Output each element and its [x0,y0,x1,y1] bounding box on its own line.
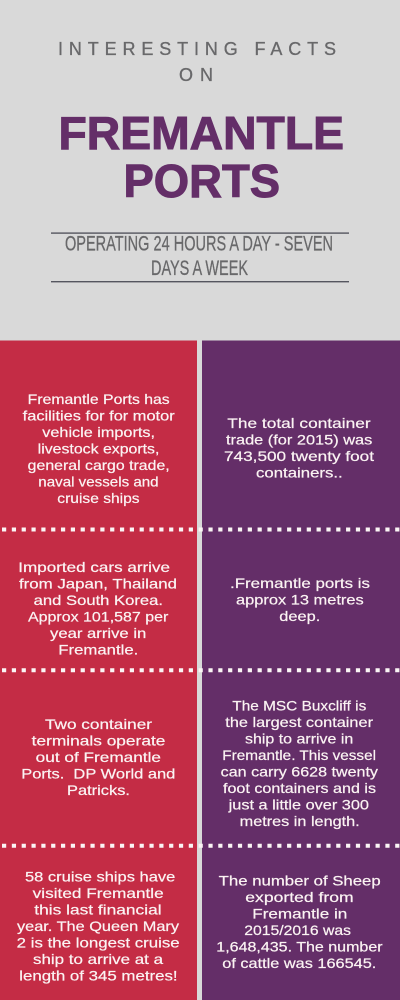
fact: imported cars: Fremantle. [58,642,138,658]
left column background [0,340,197,1000]
fact: MSC Buxcliff: foot containers and is [223,780,376,796]
title: Fremantle Ports: FREMANTLE [58,107,344,159]
fact: facilities: naval vessels and [38,474,159,490]
fact: MSC Buxcliff: just a little over 300 [228,796,369,812]
fact: MSC Buxcliff: Fremantle. This vessel [222,747,376,763]
fact: container trade: trade (for 2015) was [226,432,372,448]
fact: cruise ships: length of 345 metres! [19,968,178,984]
fact: livestock exports: exported from [245,889,354,905]
fact: container trade [224,415,374,480]
fact: cruise ships: 58 cruise ships have [25,869,176,885]
heading: interesting facts on [58,39,336,85]
fact: facilities: vehicle imports, [42,424,155,440]
fact: facilities: livestock exports, [38,440,159,456]
fact: container trade: containers.. [256,464,343,480]
fact: facilities: cruise ships [57,490,140,506]
fact: facilities: facilities for for motor [23,408,175,424]
fact: livestock exports [216,873,383,971]
title: Fremantle Ports [58,107,344,207]
fact: port depth: deep. [279,608,320,624]
fact: imported cars [18,559,177,658]
fact: MSC Buxcliff: The MSC Buxcliff is [232,698,366,714]
header panel [51,39,349,282]
fact: cruise ships: 2 is the longest cruise [17,935,180,951]
fact: MSC Buxcliff: can carry 6628 twenty [221,764,378,780]
fact: cruise ships: ship to arrive at a [33,951,163,967]
title: Fremantle Ports: PORTS [124,155,280,207]
fact: livestock exports: The number of Sheep [219,873,381,889]
fact: livestock exports: of cattle was 166545. [222,955,376,971]
fact: MSC Buxcliff: ship to arrive in [245,730,353,746]
fact: cruise ships [17,869,180,984]
fact: imported cars: Approx 101,587 per [28,608,169,624]
fact: facilities [23,391,175,506]
fact: container terminals: Patricks. [67,782,130,798]
fact: facilities: Fremantle Ports has [28,391,170,407]
fact: port depth [230,575,370,624]
subtitle: operating hours with rules: DAYS A WEEK [151,256,248,280]
fact: MSC Buxcliff [221,698,378,829]
subtitle: operating hours with rules [51,232,349,282]
heading: interesting facts on: ON [179,65,213,85]
fact: imported cars: year arrive in [50,625,146,641]
fact: cruise ships: year. The Queen Mary [17,918,179,934]
fact: port depth: .Fremantle ports is [230,575,370,591]
fact: imported cars: from Japan, Thailand [19,576,177,592]
fact: imported cars: Imported cars arrive [18,559,170,575]
fact: container terminals: Two container [45,716,152,732]
fact: container terminals: out of Fremantle [36,749,161,765]
heading: interesting facts on: INTERESTING FACTS [58,39,336,59]
fact: cruise ships: visited Fremantle [33,885,164,901]
fact: container terminals: Ports. DP World and [21,766,175,782]
fact: MSC Buxcliff: the largest container [225,714,373,730]
right column background [202,340,400,1000]
fact: facilities: general cargo trade, [28,457,170,473]
fact: container terminals: terminals operate [32,732,166,748]
fact: container trade: 743,500 twenty foot [224,448,374,464]
fact: livestock exports: 1,648,435. The number [216,939,383,955]
fact: MSC Buxcliff: metres in length. [240,813,360,829]
fact: imported cars: and South Korea. [34,592,163,608]
fact: port depth: approx 13 metres [236,592,364,608]
fact: container trade: The total container [227,415,371,431]
fact: cruise ships: this last financial [34,902,162,918]
fact: container terminals [21,716,175,798]
fact: livestock exports: 2015/2016 was [244,922,351,938]
fact: livestock exports: Fremantle in [252,906,347,922]
